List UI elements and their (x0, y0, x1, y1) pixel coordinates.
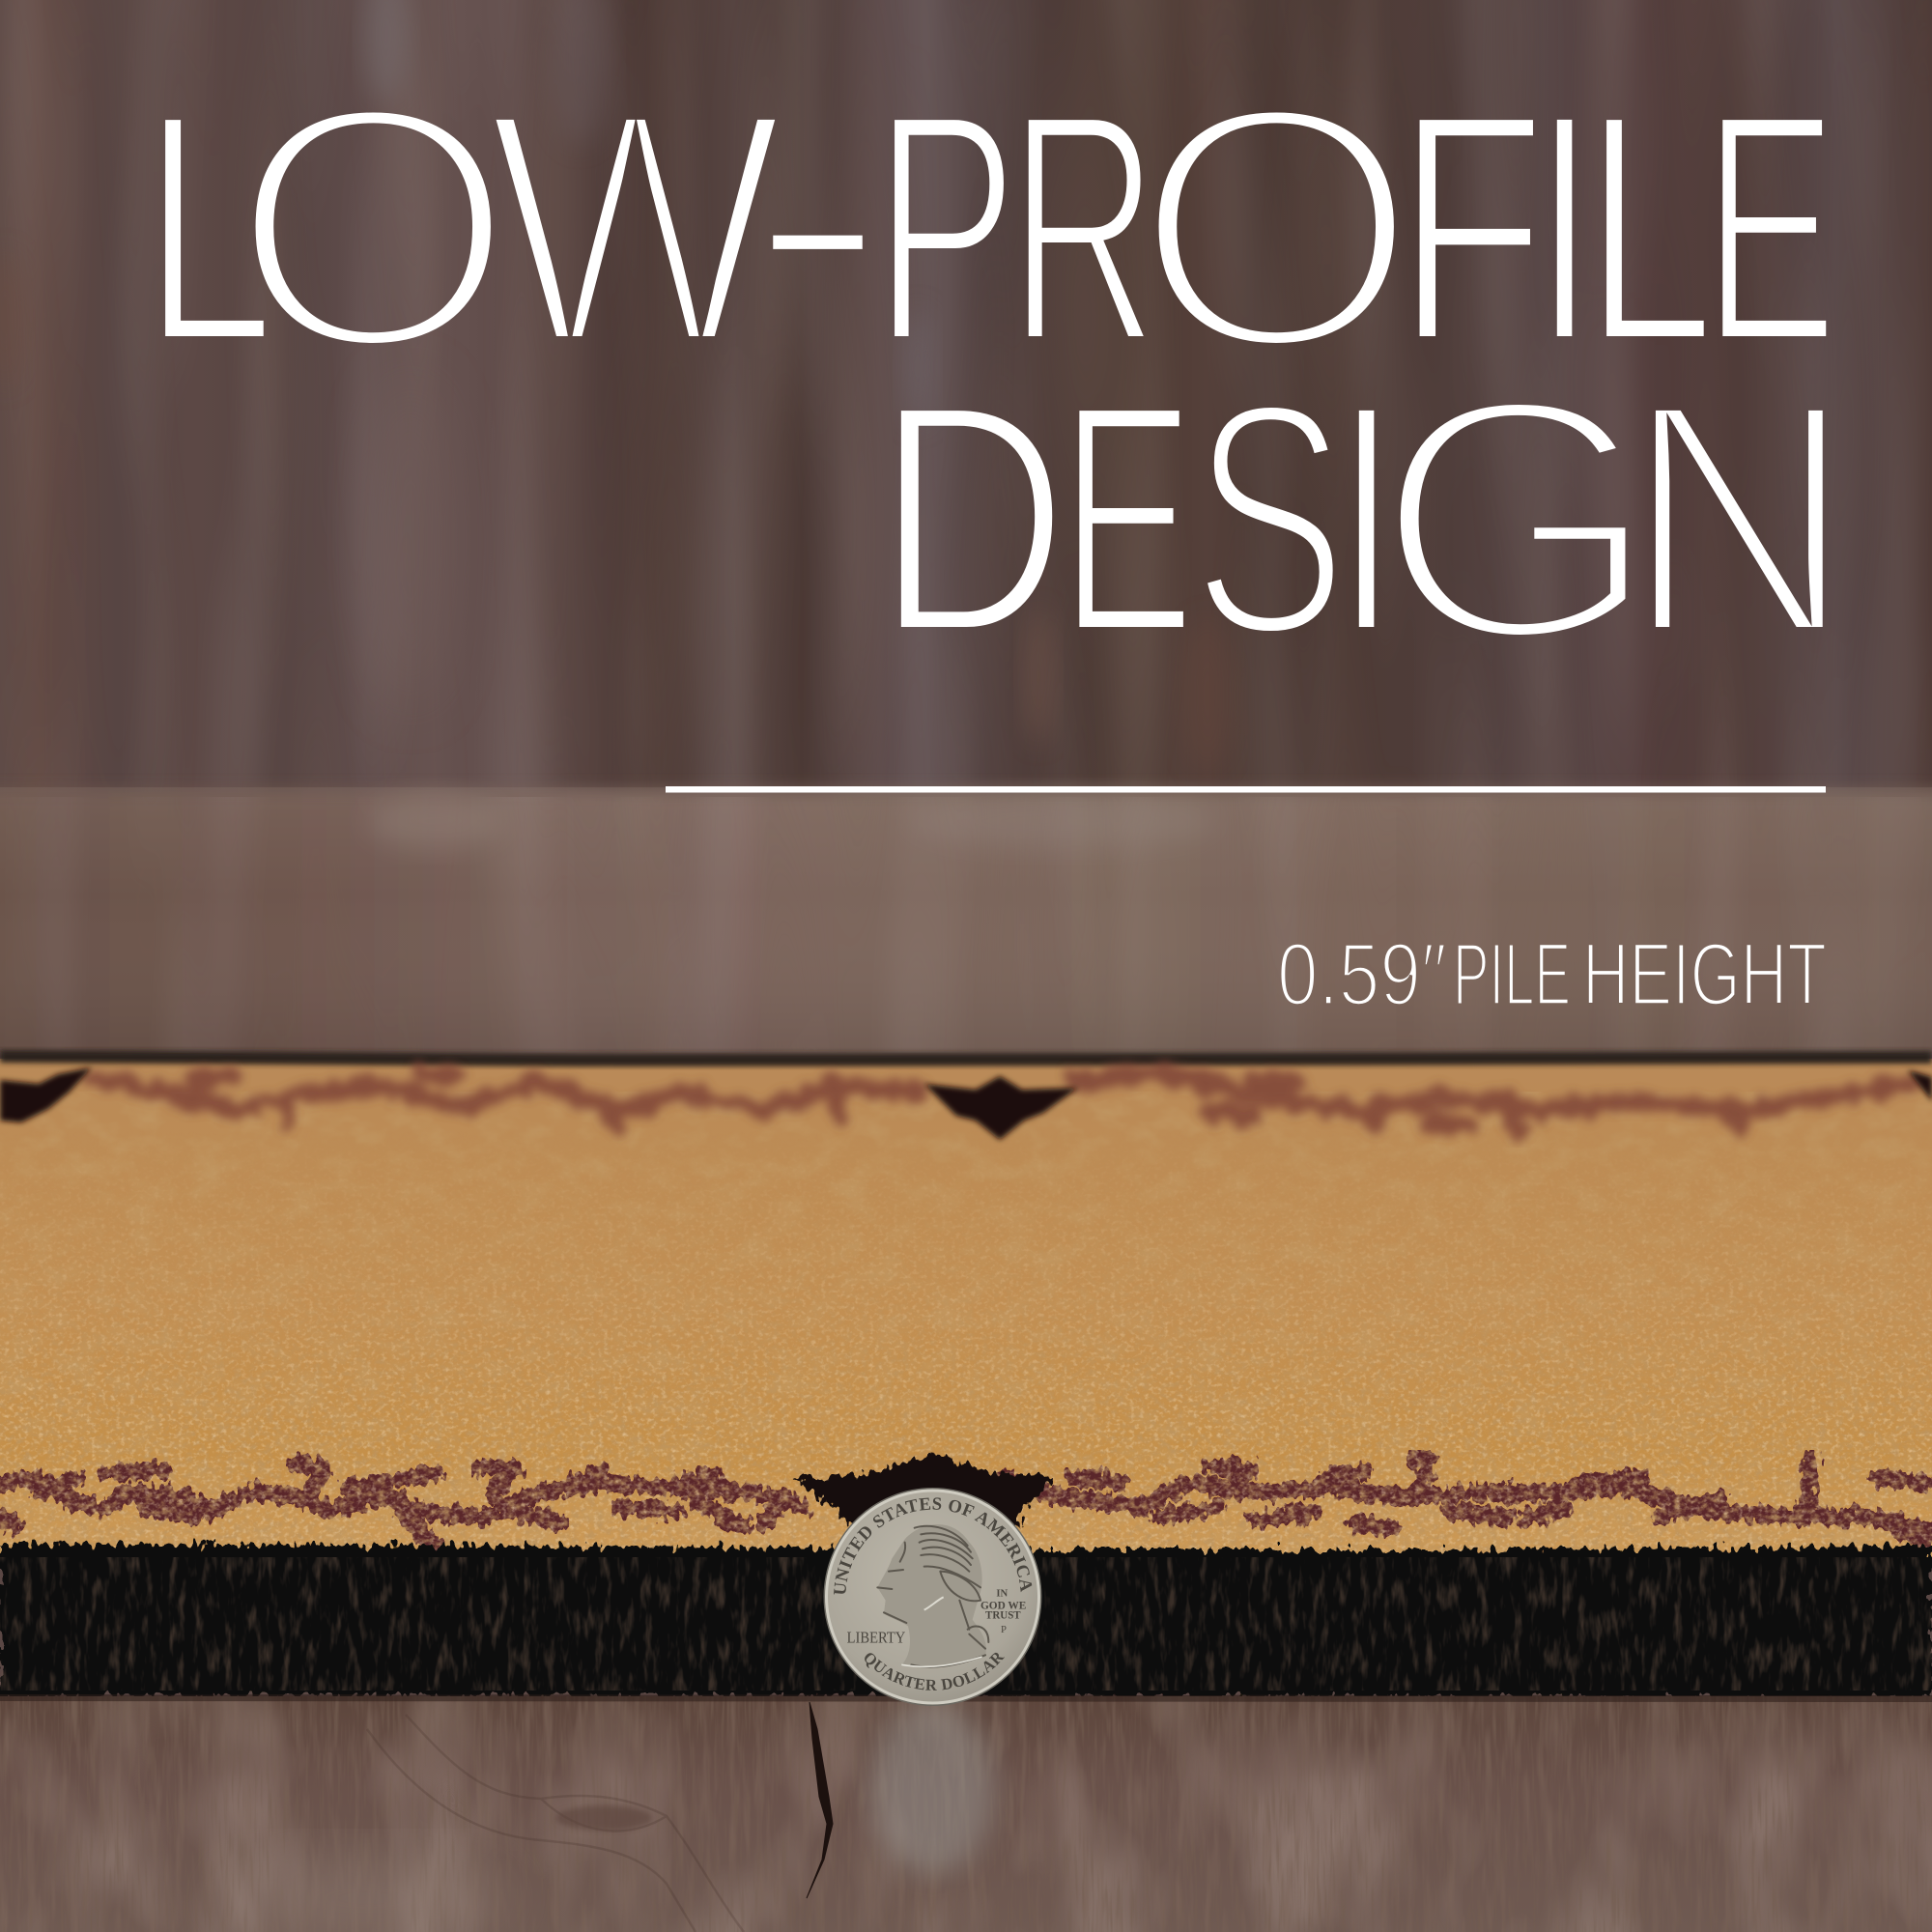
rug tan field (0, 1059, 1932, 1561)
title: LOW-PROFILE DESIGN: L (142, 43, 274, 411)
title: LOW-PROFILE DESIGN: N (1623, 331, 1856, 704)
text: pile height callout (1281, 945, 1824, 1005)
title: LOW-PROFILE DESIGN: R (1009, 45, 1159, 412)
icon: quarter dollar coin (823, 1488, 1041, 1706)
title: LOW-PROFILE DESIGN: P (873, 44, 1018, 411)
floor knot (555, 1805, 652, 1831)
near star motif (792, 1454, 1053, 1546)
rug far edge dark line (0, 1050, 1932, 1066)
coin inscriptions: IN (996, 1589, 1008, 1600)
title: LOW-PROFILE DESIGN: G (1374, 326, 1662, 713)
title: LOW-PROFILE DESIGN: E (1703, 44, 1837, 411)
text: pile height callout: 0.59″ (1277, 925, 1447, 1024)
panel: coir doormat with tan field (0, 1050, 1932, 1561)
title: LOW-PROFILE DESIGN (165, 112, 1826, 635)
panel: blurred wood wall background (0, 0, 1932, 802)
coin reflection (869, 1700, 995, 1874)
coin inscriptions: GOD WE (980, 1598, 1026, 1611)
coin portrait (877, 1524, 988, 1668)
title: LOW-PROFILE DESIGN: O (1133, 33, 1420, 421)
text: pile height callout: HEIGHT (1582, 925, 1827, 1024)
title: LOW-PROFILE DESIGN: E (1060, 335, 1195, 701)
text: pile height callout: PILE (1453, 925, 1571, 1024)
title: LOW-PROFILE DESIGN: W (486, 42, 787, 414)
coin inscriptions: P (1001, 1625, 1007, 1635)
title: LOW-PROFILE DESIGN: D (875, 334, 1068, 701)
coin inscriptions (834, 1497, 1032, 1690)
title: LOW-PROFILE DESIGN: S (1192, 334, 1348, 703)
far star motifs (0, 1067, 1932, 1140)
far burgundy vine border (92, 1072, 1913, 1130)
panel: blurred baseboard (0, 787, 1932, 1065)
divider rule (666, 786, 1826, 792)
title: LOW-PROFILE DESIGN: I (1322, 329, 1410, 706)
floor wood figure (367, 1715, 744, 1932)
title: LOW-PROFILE DESIGN: - (751, 82, 885, 361)
coin inscriptions: UNITED STATES OF AMERICA (834, 1497, 1032, 1594)
title: LOW-PROFILE DESIGN: O (230, 33, 517, 421)
near burgundy vine border (0, 1459, 1932, 1546)
panel: black mat side edge (0, 1544, 1932, 1698)
floor crack (807, 1702, 833, 1898)
title: LOW-PROFILE DESIGN: L (1584, 43, 1715, 411)
title: LOW-PROFILE DESIGN: I (1520, 39, 1608, 415)
rug fibre texture (0, 1188, 1932, 1555)
coin inscriptions: LIBERTY (847, 1629, 905, 1647)
panel: wooden floor foreground (0, 1694, 1932, 1932)
floor bright patch (222, 1855, 512, 1932)
coin inscriptions: TRUST (985, 1607, 1021, 1621)
coin inscriptions: QUARTER DOLLAR (865, 1652, 1005, 1690)
title: LOW-PROFILE DESIGN: F (1396, 43, 1547, 411)
